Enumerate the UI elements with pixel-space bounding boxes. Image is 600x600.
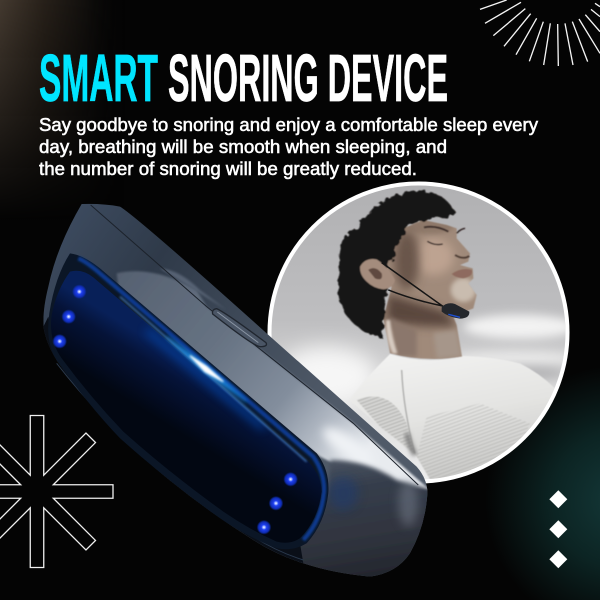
hair xyxy=(338,191,455,338)
led lights xyxy=(52,284,298,535)
chin strap and mini device xyxy=(382,263,443,307)
ear xyxy=(360,259,395,289)
starburst outline decoration xyxy=(0,416,113,568)
title xyxy=(39,41,448,116)
shaded lower corner xyxy=(300,457,428,576)
title: SMART xyxy=(39,41,158,116)
snoring device product xyxy=(33,197,440,587)
description text xyxy=(39,115,538,179)
photo circle: sleeping man wearing device xyxy=(265,180,577,490)
seam line xyxy=(91,205,418,485)
front panel rim xyxy=(48,253,328,549)
band between seam and panel xyxy=(117,271,430,490)
description text: day, breathing will be smooth when sleeping, and xyxy=(39,137,447,157)
bright highlight near corner xyxy=(320,424,362,459)
description text: Say goodbye to snoring and enjoy a comfortable sleep every xyxy=(39,115,538,135)
device body xyxy=(33,197,440,587)
neck and face xyxy=(380,217,480,363)
eye, nose and lips xyxy=(427,241,443,245)
front panel xyxy=(51,271,322,543)
button xyxy=(212,309,266,347)
description text: the number of snoring will be greatly reduced. xyxy=(39,159,417,179)
sweater xyxy=(364,354,554,479)
reflection above seam xyxy=(161,268,220,305)
light streak xyxy=(120,297,307,462)
blue glow rim xyxy=(78,258,324,540)
lower edge highlight xyxy=(57,363,303,560)
lower edge dark wrap xyxy=(40,317,303,563)
diamond markers xyxy=(549,490,567,568)
sunburst decoration xyxy=(480,0,600,66)
